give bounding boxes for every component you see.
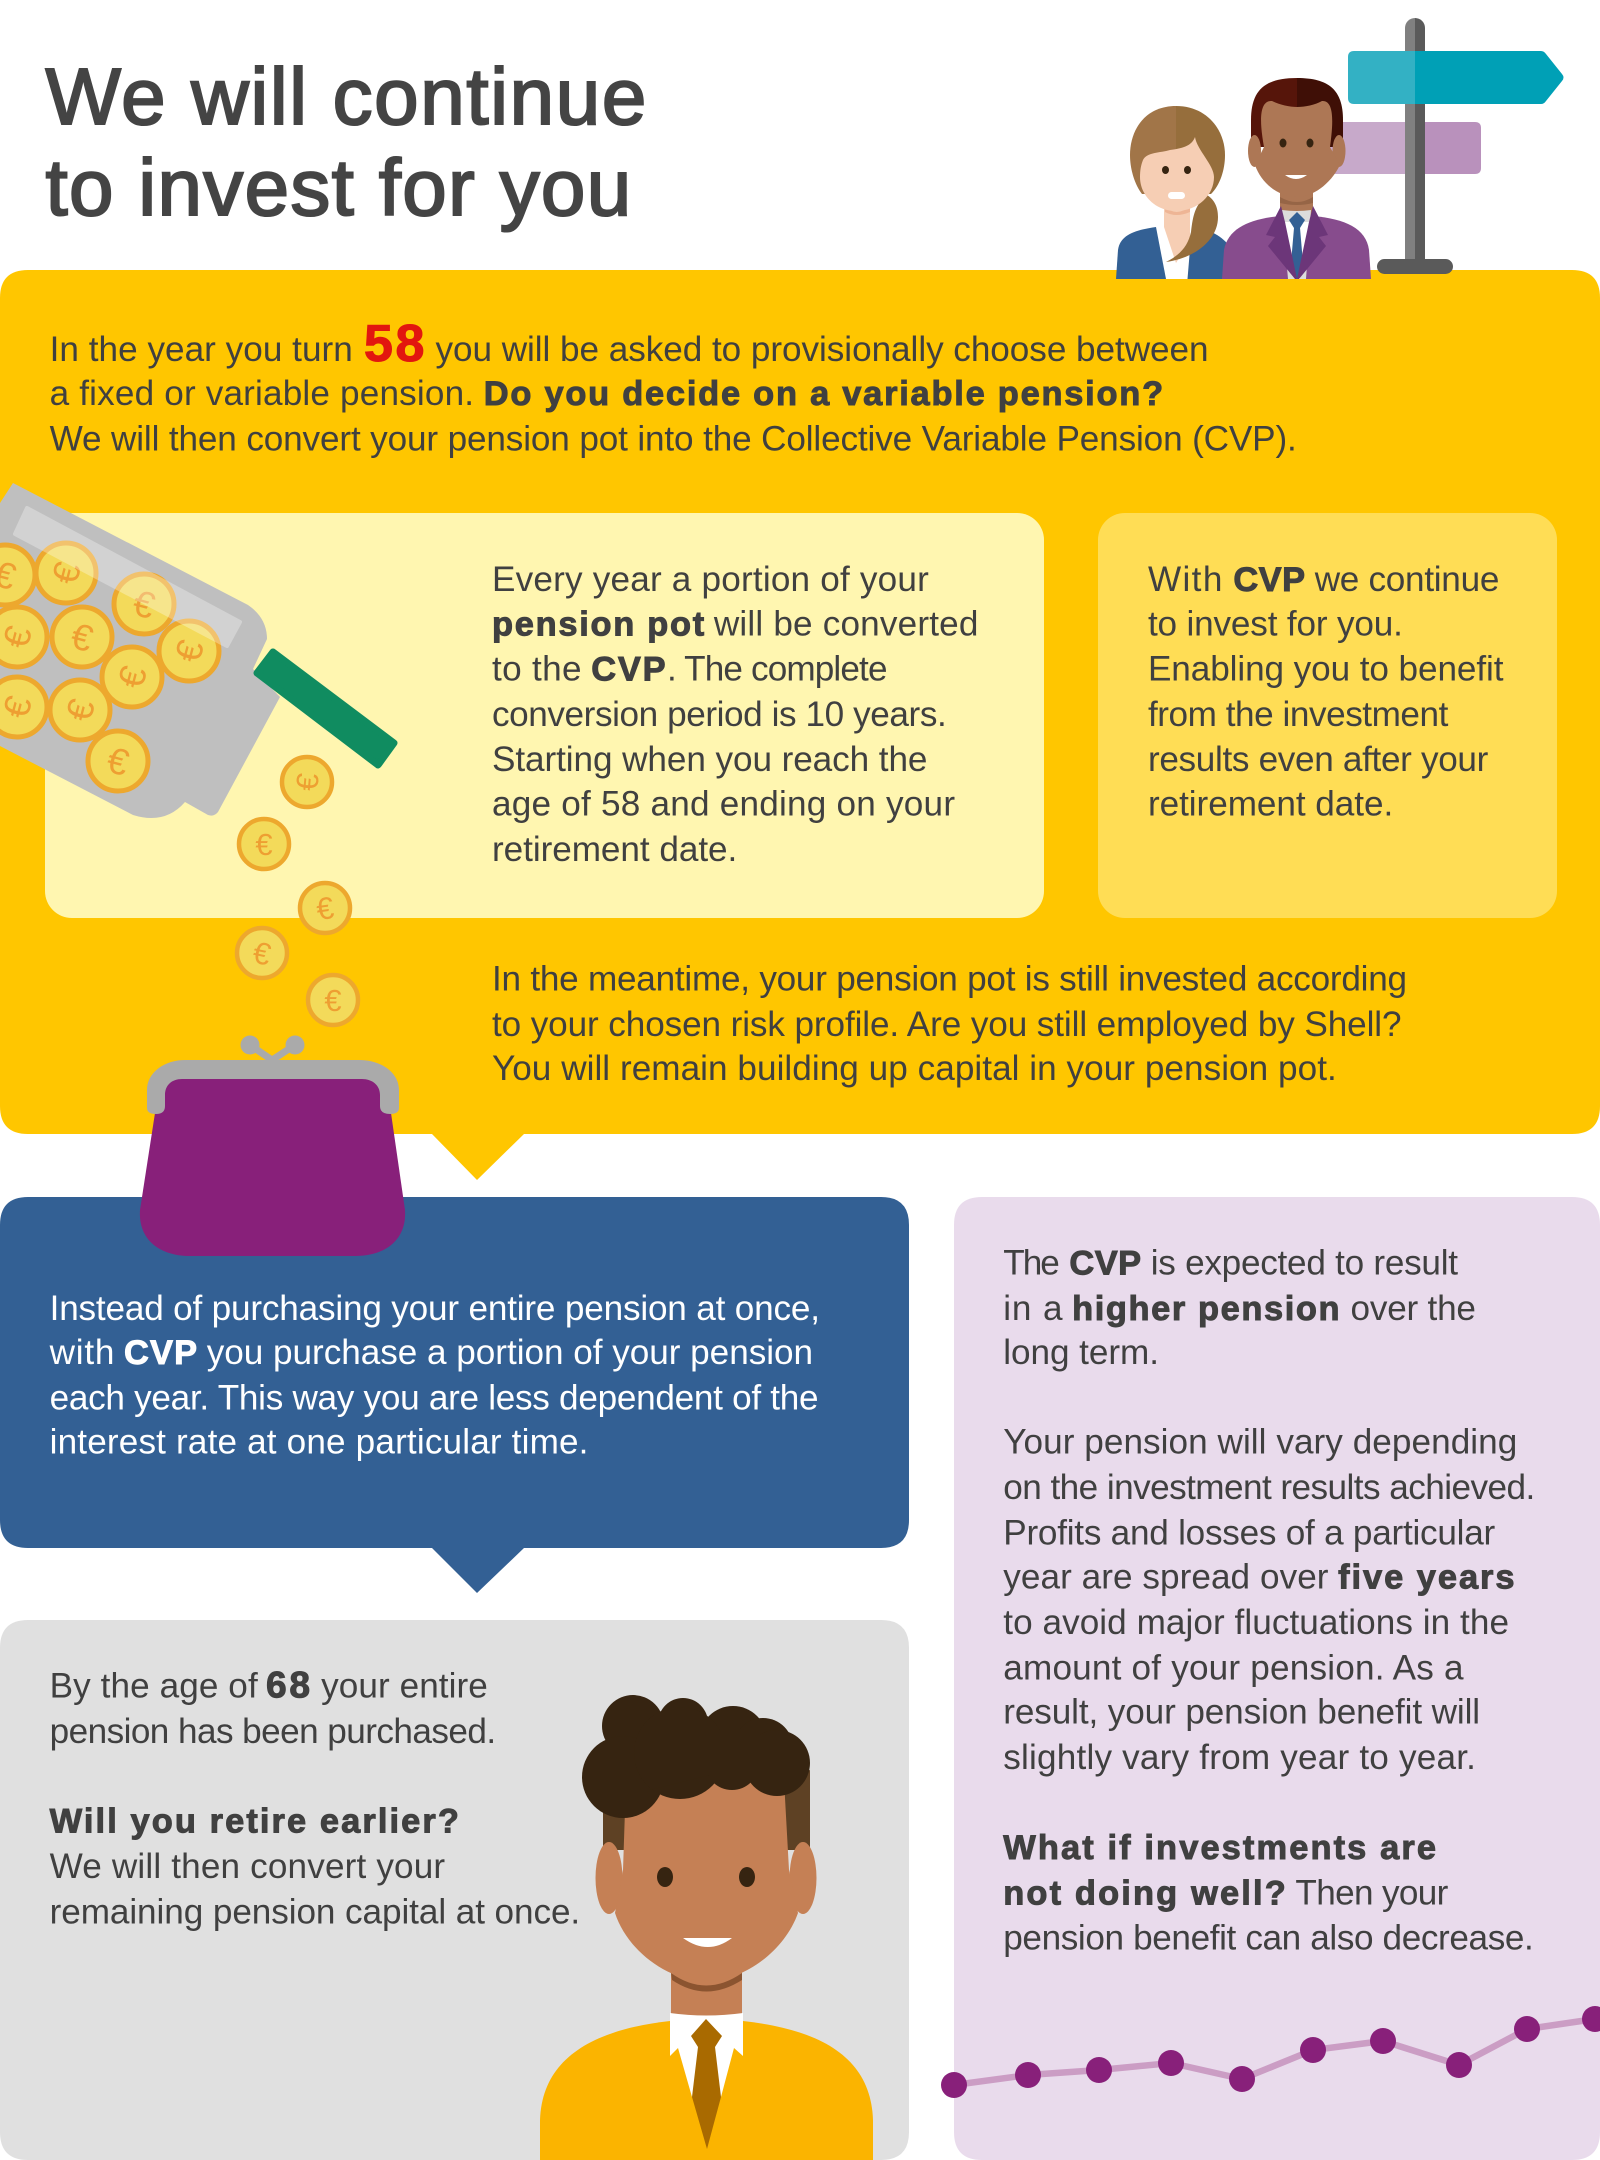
lilac panel text: pension benefit can also decrease. [1003,1919,1534,1958]
CVP text: retirement date. [1148,785,1393,824]
lilac panel text: to avoid major fluctuations in the [1003,1603,1509,1642]
lilac panel text [1003,1243,1535,1958]
grey panel text: pension has been purchased. [50,1712,496,1751]
falling coins [237,757,358,1025]
coins in wallet: € [129,582,160,627]
conversion text: to the [492,650,582,689]
blue panel text: each year. This way you are less dependent of the [50,1379,819,1418]
conversion text: will be converted [713,605,978,644]
meantime text: to your chosen risk profile. Are you still employed by Shell? [492,1005,1402,1044]
falling coins: € [255,827,273,862]
CVP text [1148,560,1504,824]
lilac panel text: Your pension will vary depending [1003,1423,1517,1462]
coins in wallet: € [167,635,212,666]
intro text [50,315,1297,458]
meantime text [492,960,1407,1088]
lilac panel text: Profits and losses of a particular [1003,1514,1496,1553]
lilac panel text: Then your [1295,1873,1449,1912]
CVP text: With [1148,560,1222,599]
lilac panel text: year are spread over [1003,1558,1329,1597]
meantime text: In the meantime, your pension pot is still invested according [492,960,1407,999]
intro text: a fixed or variable pension. [50,374,474,413]
grey panel text: We will then convert your [50,1847,445,1886]
coins in wallet: € [110,661,155,692]
lilac panel text: The [1003,1243,1060,1282]
title [45,52,646,232]
icon: man [1222,78,1371,279]
conversion text: Every year a portion of your [492,560,929,599]
meantime text: You will remain building up capital in your pension pot. [492,1049,1337,1088]
coins in wallet: € [44,557,89,588]
conversion text: . The complete [667,650,887,689]
icon: signpost [1330,18,1564,274]
CVP text: from the investment [1148,695,1449,734]
lilac panel text: on the investment results achieved. [1003,1468,1535,1507]
falling coins: € [250,935,274,972]
icon: purse [140,1036,405,1256]
CVP text: CVP [1233,561,1305,599]
panel: gold CVP box [1098,513,1557,918]
title: to invest for you [45,143,631,232]
CVP text: results even after your [1148,740,1489,779]
lilac panel text: over the [1351,1289,1476,1328]
lilac panel text: slightly vary from year to year. [1003,1738,1476,1777]
grey panel text: remaining pension capital at once. [50,1893,580,1932]
title: We will continue [45,52,646,141]
lilac panel text: long term. [1003,1333,1159,1372]
conversion text [492,560,978,869]
blue panel text: interest rate at one particular time. [50,1423,588,1462]
panel: pale yellow conversion box [45,513,1044,918]
conversion text: retirement date. [492,830,737,869]
intro text: In the year you turn [50,330,353,369]
panel: blue purchase box [0,1197,909,1593]
grey panel text: your entire [321,1667,488,1706]
icon: man with curly hair [540,1695,873,2160]
icon: wallet with coins [0,483,394,818]
coins in wallet: € [103,739,134,784]
grey panel text: Will you retire earlier? [50,1803,459,1841]
blue panel text [49,1289,820,1462]
lilac panel text: CVP [1069,1244,1141,1282]
conversion text: age of 58 and ending on your [492,785,955,824]
grey panel text: By the age of [50,1667,258,1706]
blue panel text: you purchase a portion of your pension [207,1333,813,1372]
lilac panel text: is expected to result [1151,1243,1458,1282]
coins in wallet [0,543,219,791]
CVP text: Enabling you to benefit [1148,650,1504,689]
CVP text: to invest for you. [1148,605,1403,644]
panel: yellow intro [0,270,1600,1180]
lilac panel text: What if investments are [1003,1829,1436,1867]
lilac panel text: five years [1338,1559,1515,1597]
icon: woman [1116,106,1232,279]
conversion text: pension pot [492,606,705,644]
panel: grey retirement box [0,1620,909,2160]
coins in wallet: € [67,615,98,660]
lilac panel text: result, your pension benefit will [1003,1693,1480,1732]
intro text: you will be asked to provisionally choose between [435,330,1209,369]
lilac panel text: higher pension [1072,1290,1340,1328]
intro text: 58 [364,315,424,373]
coins in wallet: € [58,694,103,725]
lilac panel text: not doing well? [1003,1874,1286,1912]
conversion text: Starting when you reach the [492,740,927,779]
grey panel text: 68 [266,1664,310,1706]
grey panel text [50,1664,580,1932]
conversion text: CVP [591,651,666,689]
lilac panel text: in a [1003,1289,1063,1328]
line chart [941,2006,1600,2098]
intro text: We will then convert your pension pot into the Collective Variable Pension (CVP). [50,419,1297,458]
falling coins: € [314,890,336,927]
blue panel text: with [49,1333,114,1372]
falling coins: € [324,983,342,1018]
blue panel text: Instead of purchasing your entire pension at once, [50,1289,820,1328]
panel: lilac result box [954,1197,1600,2160]
CVP text: we continue [1314,560,1499,599]
blue panel text: CVP [124,1334,197,1372]
intro text: Do you decide on a variable pension? [484,375,1163,413]
conversion text: conversion period is 10 years. [492,695,947,734]
falling coins: € [289,772,326,792]
lilac panel text: amount of your pension. As a [1003,1649,1464,1688]
